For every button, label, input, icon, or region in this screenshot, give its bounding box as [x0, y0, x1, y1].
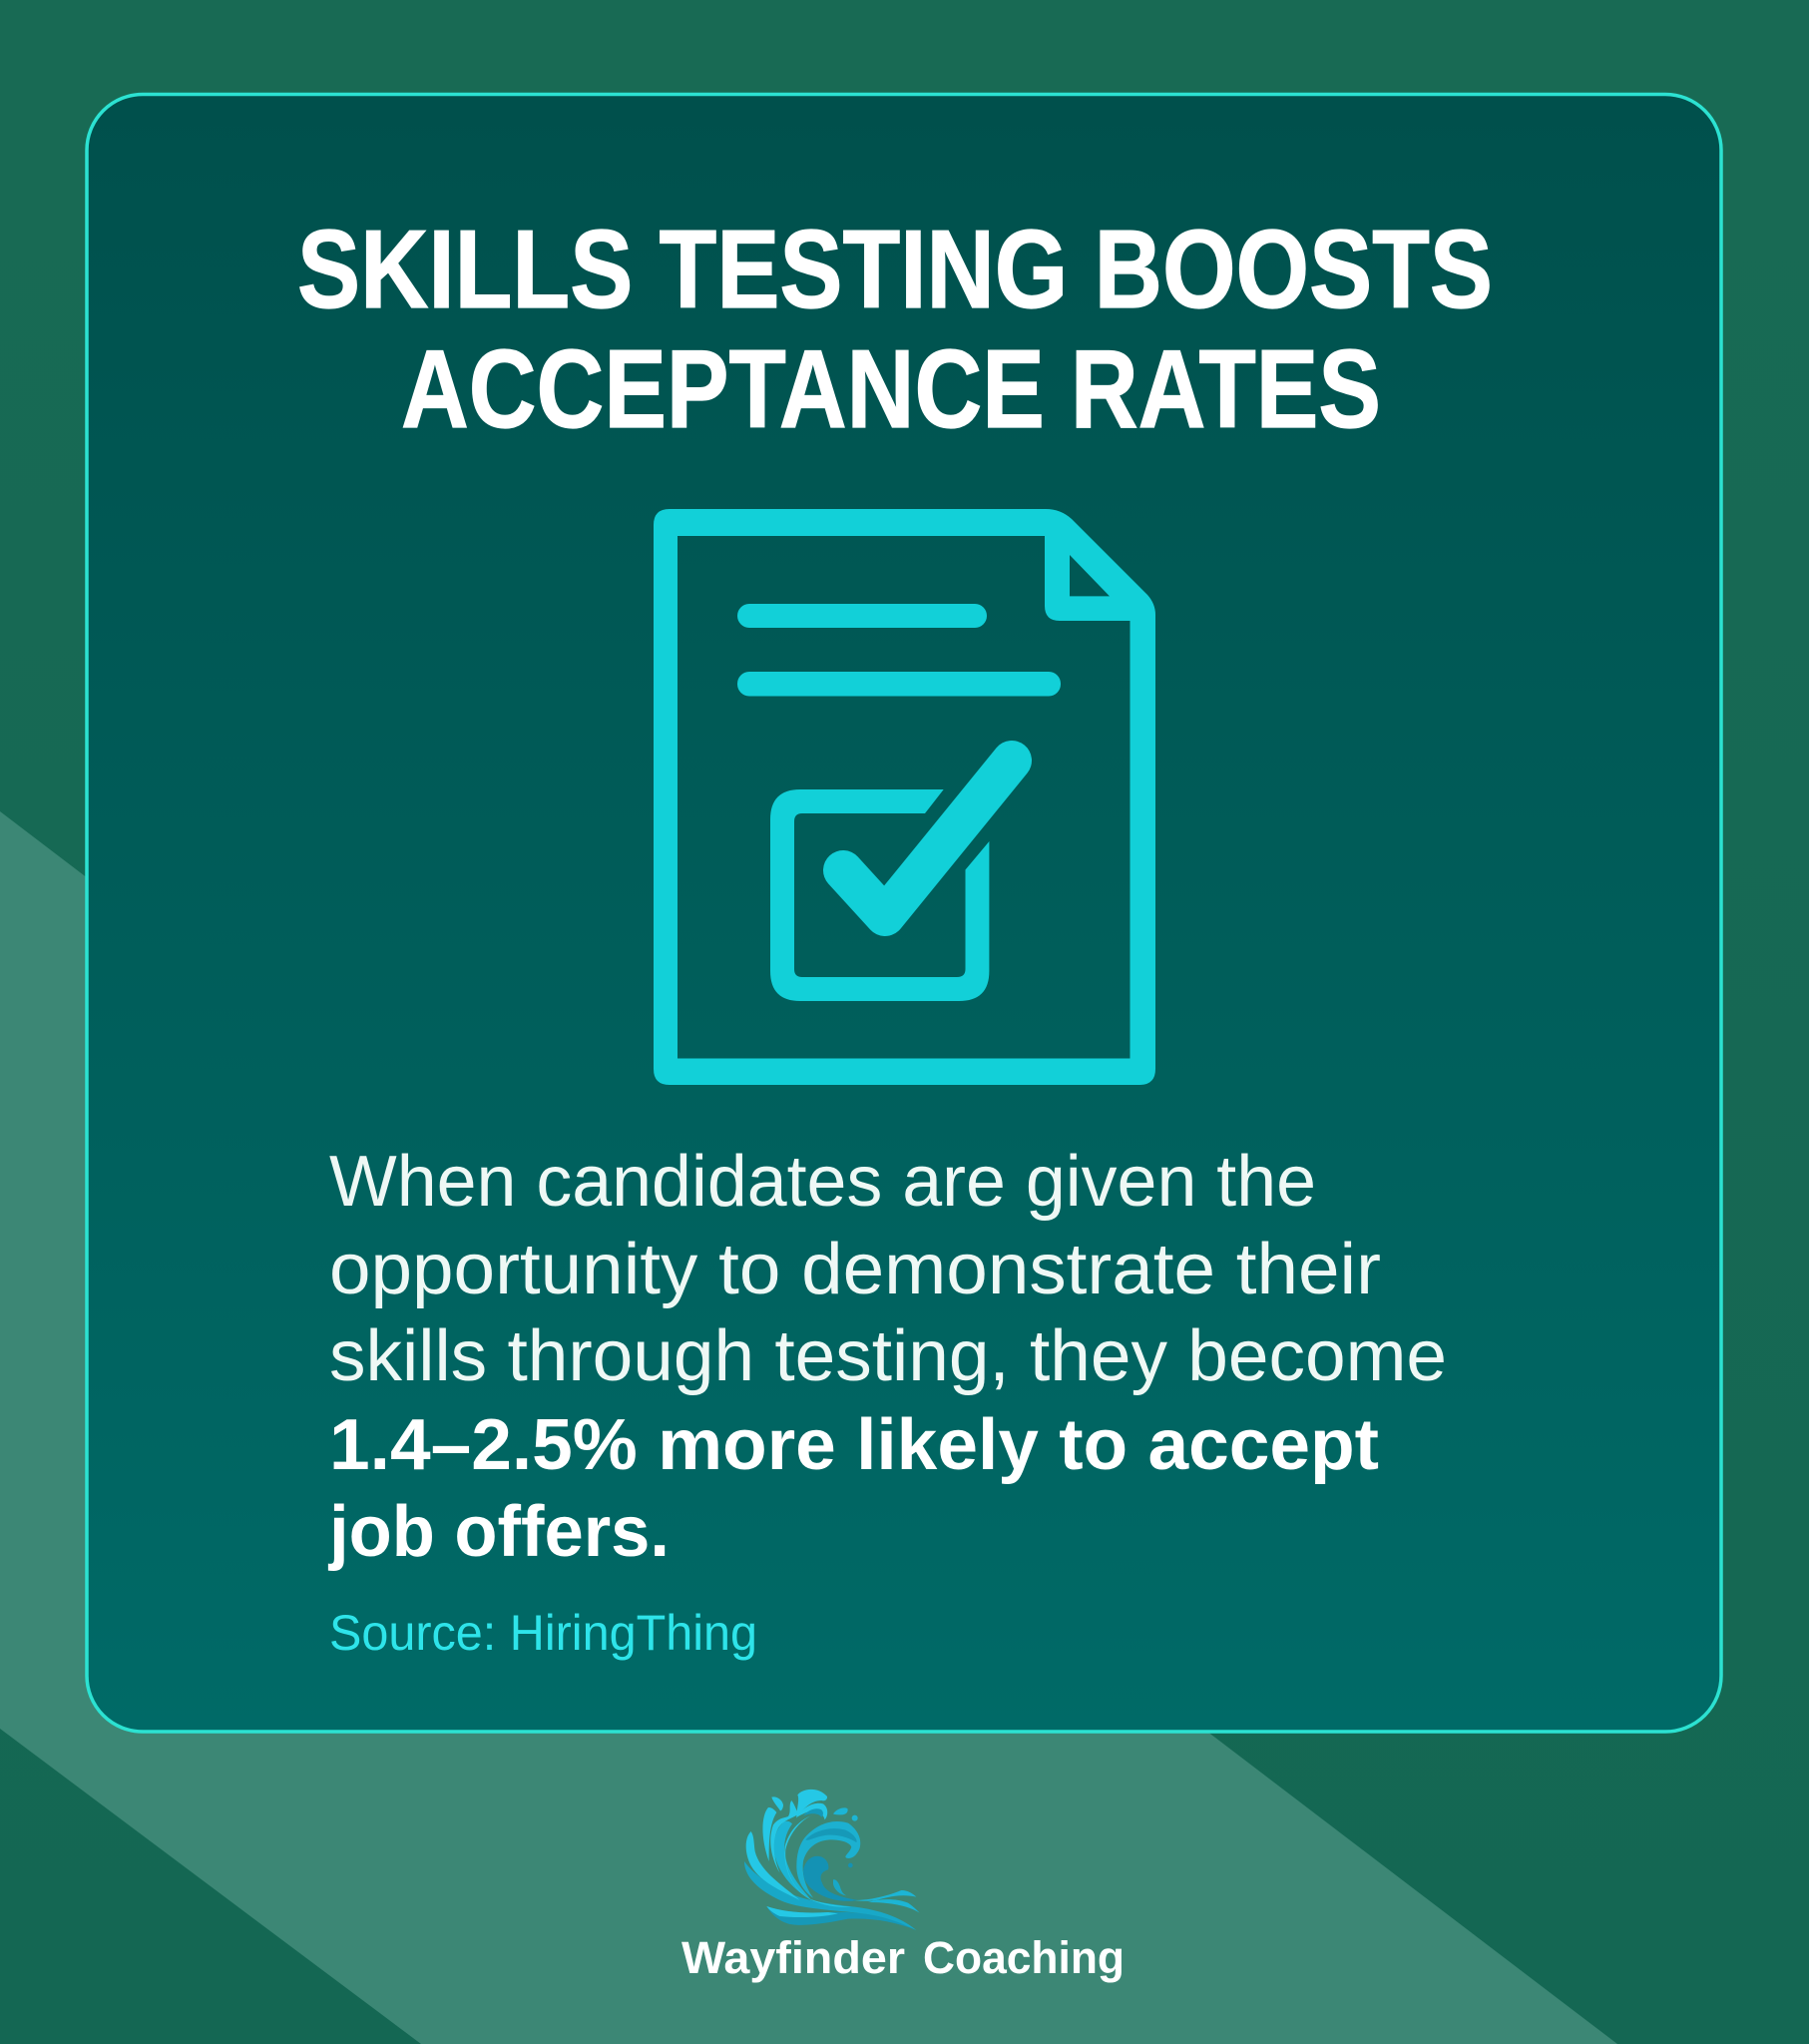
document outline	[654, 509, 1155, 1085]
logo wordmark: Coaching	[923, 1932, 1125, 1983]
body text: job offers.	[327, 1492, 670, 1572]
diagonal light band	[0, 811, 1617, 2044]
title	[297, 208, 1493, 451]
icon: wave	[744, 1789, 920, 1930]
logo wordmark	[681, 1932, 1125, 1983]
body text: 1.4–2.5% more likely to accept	[329, 1405, 1379, 1485]
title: SKILLS TESTING BOOSTS	[297, 208, 1493, 331]
body text: When candidates are given the	[329, 1142, 1316, 1222]
source: Source: HiringThing	[329, 1605, 757, 1661]
body text: skills through testing, they become	[329, 1316, 1447, 1396]
title: ACCEPTANCE RATES	[401, 327, 1381, 451]
logo: Wayfinder Coaching	[681, 1789, 1125, 1983]
check mark	[843, 761, 1012, 916]
panel: main card	[87, 94, 1721, 1732]
body text	[327, 1142, 1447, 1572]
text line one	[737, 604, 987, 628]
body text: opportunity to demonstrate their	[329, 1230, 1381, 1309]
icon: document with checkbox	[654, 509, 1155, 1085]
logo wordmark: Wayfinder	[681, 1932, 905, 1983]
checkbox	[770, 789, 989, 1001]
card background	[87, 94, 1721, 1732]
text line two	[737, 672, 1061, 697]
